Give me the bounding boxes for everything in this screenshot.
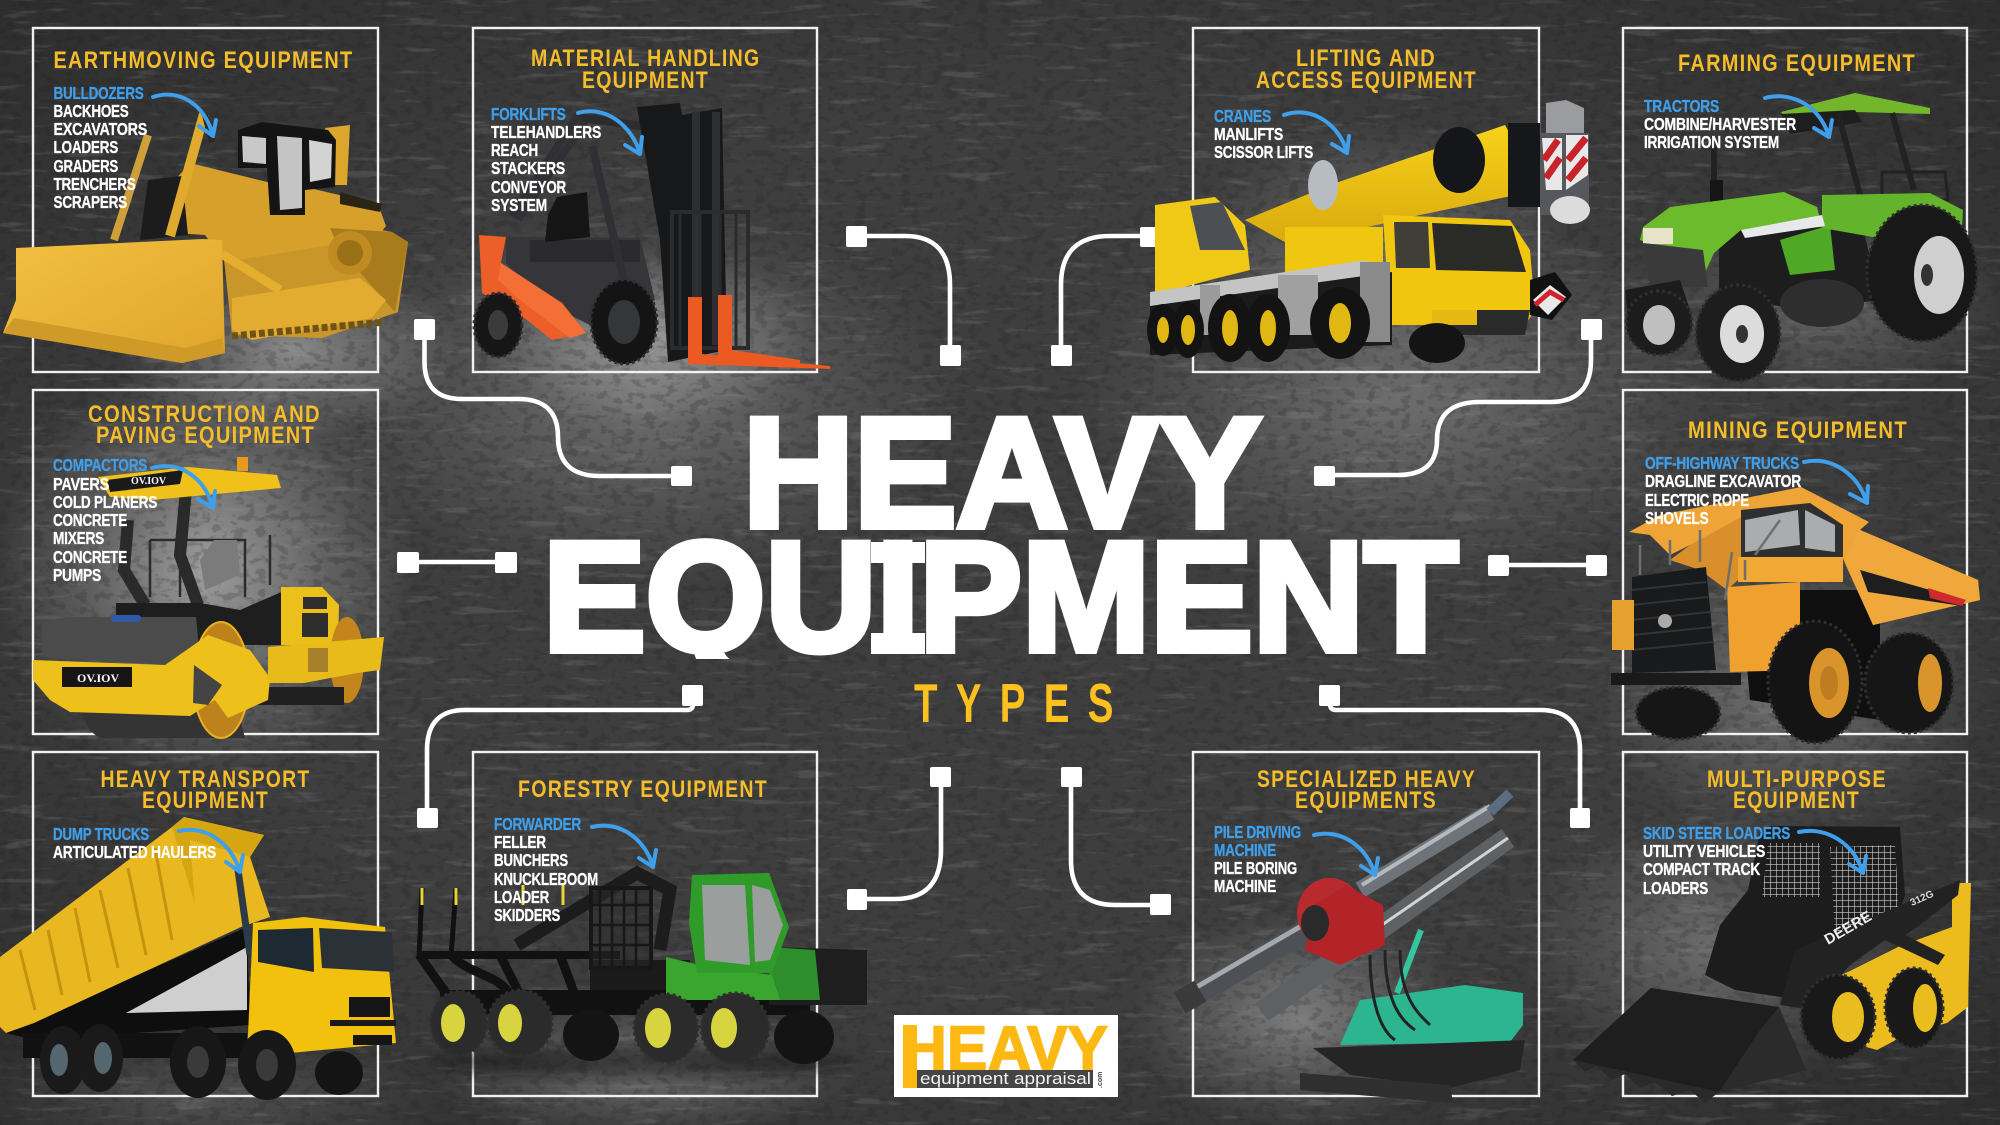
illustration: forklift (474, 103, 830, 369)
arrow (1314, 834, 1378, 875)
heading: EQUIPMENT (582, 67, 709, 94)
equipment list: SHOVELS (1645, 508, 1708, 528)
heading: LIFTING AND (1296, 45, 1436, 72)
heading: EQUIPMENTS (1295, 787, 1437, 814)
heading: MINING EQUIPMENT (1688, 417, 1908, 444)
equipment list: REACH (491, 140, 538, 160)
panel border (1623, 390, 1967, 734)
panel border (1623, 28, 1967, 372)
equipment list (1643, 823, 1790, 898)
illustration: tractor (1625, 93, 1977, 381)
panel: forestry equipment (419, 752, 867, 1096)
main title: EQUIPMENT (543, 510, 1458, 684)
equipment list (54, 83, 147, 212)
panel border (33, 390, 378, 734)
panel: earthmoving equipment (3, 28, 408, 372)
connector: mining to title (1488, 555, 1607, 576)
main title (550, 416, 1460, 659)
equipment list: SYSTEM (491, 195, 547, 215)
equipment list (1214, 822, 1301, 896)
equipment list: CONCRETE (53, 547, 127, 567)
arrow (1284, 112, 1349, 153)
equipment list: FORKLIFTS (491, 104, 566, 124)
panel border (1193, 752, 1539, 1096)
panel: mining equipment (1611, 390, 1980, 743)
equipment list: MACHINE (1214, 840, 1276, 860)
equipment list: SCRAPERS (54, 192, 127, 212)
connector: heavy transport to title (417, 685, 703, 828)
arrow (592, 826, 656, 867)
equipment list: ELECTRIC ROPE (1645, 490, 1749, 510)
illustration: mobile crane (1147, 100, 1590, 363)
connector: earthmoving to title (414, 319, 692, 486)
arrow (153, 95, 216, 136)
equipment list: DRAGLINE EXCAVATOR (1645, 471, 1802, 491)
illustration: skid steer loader: DEERE (1822, 908, 1875, 948)
illustration: dump truck (0, 817, 396, 1100)
arrow (152, 466, 215, 508)
arrow (179, 830, 243, 872)
equipment list: TRENCHERS (54, 174, 136, 194)
equipment list: BULLDOZERS (54, 83, 144, 103)
equipment list (1645, 453, 1802, 528)
equipment list: FORWARDER (494, 814, 582, 834)
equipment list: GRADERS (54, 156, 118, 176)
connector: farming to title (1314, 319, 1602, 486)
equipment list: MIXERS (53, 528, 104, 548)
heading (1707, 766, 1887, 814)
heading (531, 45, 760, 94)
arrow (1799, 831, 1866, 873)
arrow (1804, 461, 1868, 503)
heading (1256, 45, 1477, 94)
equipment list: COMPACT TRACK (1643, 859, 1761, 879)
panel border (1193, 28, 1539, 372)
equipment list: TRACTORS (1644, 96, 1719, 116)
heading: ACCESS EQUIPMENT (1256, 67, 1477, 94)
equipment list: KNUCKLEBOOM (494, 869, 598, 889)
heading: PAVING EQUIPMENT (96, 422, 315, 449)
panel: heavy transport equipment (0, 752, 396, 1100)
equipment list: ARTICULATED HAULERS (53, 842, 216, 862)
logo: heavy equipment appraisal: equipment appraisal (920, 1069, 1091, 1088)
equipment list (53, 455, 157, 585)
main title: HEAVY (743, 386, 1261, 560)
equipment list: BUNCHERS (494, 850, 568, 870)
panel: material handling equipment (473, 28, 830, 372)
illustration: forwarder (419, 873, 867, 1078)
connector: lifting to title (1051, 227, 1161, 366)
equipment list: FELLER (494, 832, 547, 852)
illustration: road roller (33, 457, 384, 738)
equipment list: MANLIFTS (1214, 124, 1283, 144)
equipment list: CONVEYOR (491, 177, 566, 197)
heading: HEAVY TRANSPORT (100, 766, 310, 793)
equipment list: DUMP TRUCKS (53, 824, 149, 844)
connector: specialized to title (1061, 767, 1171, 915)
connector: construction to title (397, 552, 517, 573)
equipment list: SCISSOR LIFTS (1214, 142, 1313, 162)
heading (88, 401, 321, 449)
panel: construction and paving equipment (33, 390, 384, 738)
connector: multi-purpose to title (1319, 685, 1590, 828)
logo: heavy equipment appraisal: .com (1097, 1072, 1104, 1088)
heading (1257, 766, 1476, 814)
illustration: bulldozer (3, 114, 408, 363)
equipment list: PILE BORING (1214, 858, 1297, 878)
equipment list: STACKERS (491, 158, 565, 178)
panel border (1623, 752, 1967, 1096)
equipment list: CONCRETE (53, 510, 127, 530)
equipment list: LOADERS (54, 137, 118, 157)
heading: CONSTRUCTION AND (88, 401, 321, 428)
equipment list: EXCAVATORS (54, 119, 147, 139)
illustration: skid steer loader: 312G (1909, 889, 1936, 909)
connector: forestry to title (847, 767, 951, 910)
heading: EQUIPMENT (1733, 787, 1860, 814)
connector: material handling to title (846, 226, 961, 366)
illustration: haul truck (1611, 487, 1980, 743)
equipment list: UTILITY VEHICLES (1643, 841, 1765, 861)
panel: lifting and access equipment (1147, 28, 1590, 372)
equipment list: TELEHANDLERS (491, 122, 601, 142)
equipment list: LOADER (494, 887, 550, 907)
equipment list (1214, 106, 1313, 162)
equipment list: IRRIGATION SYSTEM (1644, 132, 1779, 152)
panel border (33, 752, 378, 1096)
equipment list: PUMPS (53, 565, 101, 585)
heading: FORESTRY EQUIPMENT (518, 776, 768, 803)
illustration: skid steer loader (1573, 826, 1971, 1103)
arrow (1765, 96, 1832, 137)
illustration: road roller: OV.IOV (77, 671, 119, 685)
heading: MULTI-PURPOSE (1707, 766, 1887, 793)
equipment list: OFF-HIGHWAY TRUCKS (1645, 453, 1799, 473)
equipment list: SKIDDERS (494, 905, 560, 925)
panel: farming equipment (1623, 28, 1977, 381)
heading: EARTHMOVING EQUIPMENT (54, 47, 354, 74)
equipment list (1644, 96, 1797, 152)
equipment list: SKID STEER LOADERS (1643, 823, 1790, 843)
arrow (578, 111, 642, 154)
equipment list: COLD PLANERS (53, 492, 157, 512)
panel: specialized heavy equipments (1174, 752, 1539, 1103)
heading: FARMING EQUIPMENT (1678, 50, 1916, 77)
equipment list: PILE DRIVING (1214, 822, 1301, 842)
illustration: pile driving rig (1174, 793, 1525, 1103)
heading: MATERIAL HANDLING (531, 45, 760, 72)
subtitle: types: TYPES (914, 673, 1113, 735)
logo: heavy equipment appraisal: HEAVY (903, 1014, 1108, 1084)
panel border (33, 28, 378, 372)
heading: SPECIALIZED HEAVY (1257, 766, 1476, 793)
heading: EQUIPMENT (142, 787, 269, 814)
heading (100, 766, 310, 814)
equipment list: LOADERS (1643, 878, 1708, 898)
equipment list: PAVERS (53, 474, 109, 494)
equipment list: CRANES (1214, 106, 1271, 126)
illustration: road roller: OV.IOV (131, 476, 167, 487)
equipment list (53, 824, 216, 862)
equipment list (491, 104, 601, 215)
equipment list: MACHINE (1214, 876, 1276, 896)
equipment list: COMBINE/HARVESTER (1644, 114, 1797, 134)
panel border (473, 752, 817, 1096)
equipment list: BACKHOES (54, 101, 128, 121)
panel: multi-purpose equipment (1573, 752, 1971, 1103)
equipment list: COMPACTORS (53, 455, 147, 475)
equipment list (494, 814, 598, 925)
panel border (473, 28, 817, 372)
